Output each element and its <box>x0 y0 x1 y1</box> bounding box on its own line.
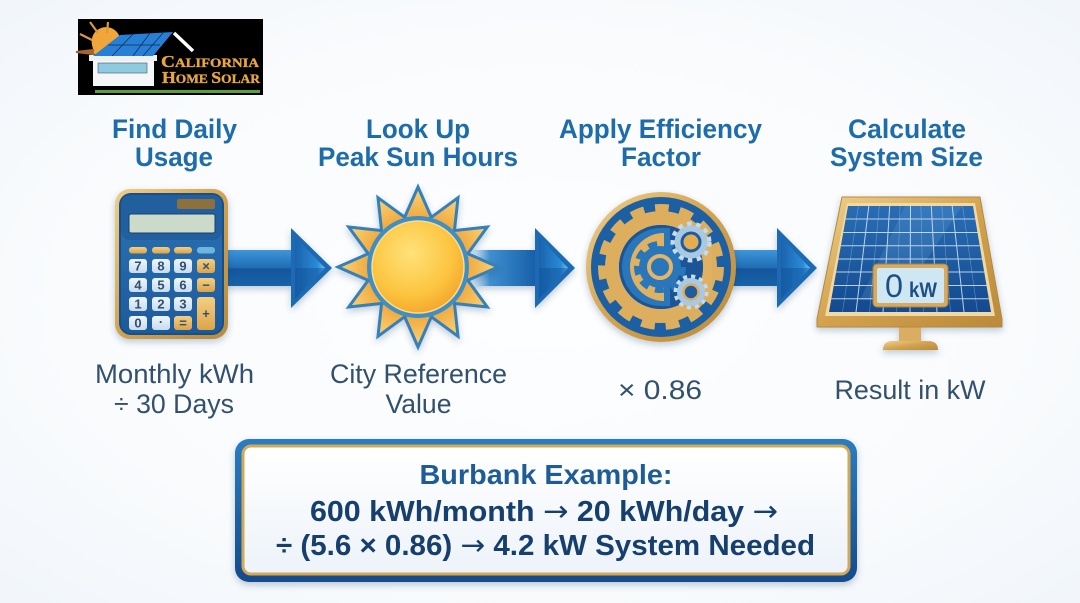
heading: Apply Efficiency Factor: Apply Efficiency <box>559 114 762 144</box>
calculator keys: = <box>179 316 187 330</box>
calculator keys: 7 <box>134 258 142 274</box>
text: Monthly kWh ÷ 30 Days: Monthly kWh <box>95 359 254 389</box>
calculator keys: 5 <box>157 278 165 292</box>
heading: Look Up Peak Sun Hours: Peak Sun Hours <box>318 142 518 172</box>
callout line 2: 600 kWh/month → 20 kWh/day → <box>310 494 778 528</box>
calculator keys: 6 <box>179 278 187 292</box>
blue gear <box>637 244 683 290</box>
logo wordmark: HOME SOLAR <box>162 68 261 87</box>
calculator keys: × <box>202 258 210 274</box>
heading: Apply Efficiency Factor <box>559 114 762 172</box>
icon: gears badge <box>586 192 736 342</box>
calculator keys <box>129 247 215 330</box>
heading: Calculate System Size: System Size <box>830 142 983 172</box>
text: Monthly kWh ÷ 30 Days: ÷ 30 Days <box>114 389 234 419</box>
heading: Find Daily Usage <box>112 114 237 172</box>
light gear bottom <box>676 277 706 307</box>
arrow 3 <box>730 228 817 308</box>
text: City Reference Value: City Reference <box>330 359 507 389</box>
calculator keys: 4 <box>134 278 142 292</box>
kW display <box>873 264 948 307</box>
callout: Burbank example <box>235 439 857 582</box>
logo wordmark: CALIFORNIA <box>161 52 259 71</box>
icon: logo sun <box>76 22 120 57</box>
icon: solar panel <box>817 197 1002 350</box>
callout title: Burbank Example: <box>420 459 672 490</box>
icon: calculator <box>115 189 228 339</box>
arrow 2 <box>470 228 575 308</box>
panel cell grid <box>829 206 991 312</box>
calculator keys: 9 <box>179 258 187 274</box>
light gear top <box>673 224 709 260</box>
calculator keys: − <box>202 278 210 292</box>
heading: Look Up Peak Sun Hours <box>318 114 518 172</box>
logo: California Home Solar <box>76 19 263 95</box>
kW display: 0 <box>885 268 903 304</box>
icon: sun <box>338 187 498 347</box>
calculator keys: 3 <box>179 296 187 312</box>
heading: Look Up Peak Sun Hours: Look Up <box>366 114 470 144</box>
calculator keys: + <box>202 306 210 321</box>
text: × 0.86: × 0.86 <box>618 375 702 405</box>
icon: logo house <box>89 32 193 86</box>
calculator keys: 1 <box>134 296 142 312</box>
calculator keys: 2 <box>157 296 165 312</box>
kW display: kW <box>909 279 937 302</box>
callout line 3: ÷ (5.6 × 0.86) → 4.2 kW System Needed <box>276 528 815 562</box>
heading: Apply Efficiency Factor: Factor <box>621 142 701 172</box>
calculator keys: · <box>159 314 163 330</box>
text: Monthly kWh ÷ 30 Days <box>95 359 254 419</box>
arrow 1 <box>226 228 332 308</box>
heading: Calculate System Size <box>830 114 983 172</box>
calculator keys: 8 <box>157 258 165 274</box>
text: City Reference Value: Value <box>386 389 452 419</box>
text: City Reference Value <box>330 359 507 419</box>
heading: Find Daily Usage: Find Daily <box>112 114 237 144</box>
panel stand <box>883 326 938 350</box>
calculator keys: 0 <box>134 316 142 330</box>
logo wordmark <box>161 52 261 87</box>
heading: Find Daily Usage: Usage <box>135 142 213 172</box>
heading: Calculate System Size: Calculate <box>848 114 966 144</box>
text: Result in kW: Result in kW <box>834 375 986 405</box>
large gold gear <box>603 209 719 325</box>
